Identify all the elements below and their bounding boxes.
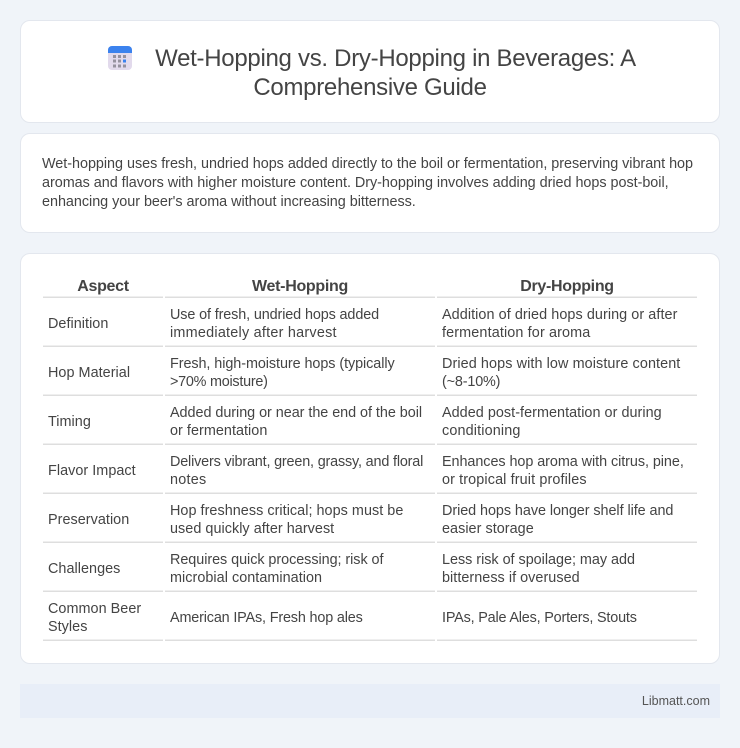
common beer styles dry: IPAs, Pale Ales, Porters, Stouts	[442, 610, 637, 626]
row: preservation: Preservation	[48, 512, 129, 528]
row: flavor impact: Flavor Impact	[48, 463, 136, 479]
hop material dry	[442, 356, 680, 390]
row: challenges: Challenges	[48, 561, 120, 577]
footer brand: Libmatt.com	[642, 694, 710, 708]
flavor impact wet	[170, 454, 423, 488]
row: definition: Definition	[48, 316, 108, 332]
intro card	[20, 133, 720, 233]
timing wet	[170, 405, 422, 439]
challenges wet: Requires quick processing; risk of	[170, 552, 383, 568]
challenges wet	[170, 552, 384, 586]
challenges dry	[442, 552, 635, 586]
definition dry: Addition of dried hops during or after	[442, 307, 677, 323]
hop material wet	[170, 356, 395, 390]
timing wet: Added during or near the end of the boil	[170, 405, 422, 421]
hop material dry: Dried hops with low moisture content	[442, 356, 680, 372]
flavor impact wet: Delivers vibrant, green, grassy, and floral	[170, 454, 423, 470]
preservation wet	[170, 503, 403, 537]
timing dry: Added post-fermentation or during	[442, 405, 662, 421]
row: common beer styles: Common Beer	[48, 601, 141, 617]
row: common beer styles	[48, 601, 141, 635]
definition dry	[442, 307, 678, 341]
intro text: enhancing your beer's aroma without increasing bitterness.	[42, 194, 416, 210]
icon: calendar	[108, 46, 132, 70]
intro text: aromas and flavors with higher moisture content. Dry-hopping involves adding dried hops post-boil,	[42, 175, 669, 191]
preservation dry	[442, 503, 673, 537]
table header: aspect: Aspect	[77, 278, 129, 295]
definition dry: fermentation for aroma	[442, 325, 590, 341]
title card	[20, 20, 720, 123]
flavor impact dry: or tropical fruit profiles	[442, 472, 587, 488]
challenges dry: bitterness if overused	[442, 570, 580, 586]
row: hop material: Hop Material	[48, 365, 130, 381]
flavor impact dry	[442, 454, 684, 488]
flavor impact dry: Enhances hop aroma with citrus, pine,	[442, 454, 684, 470]
preservation wet: used quickly after harvest	[170, 521, 334, 537]
challenges wet: microbial contamination	[170, 570, 322, 586]
preservation dry: Dried hops have longer shelf life and	[442, 503, 673, 519]
footer	[20, 684, 720, 718]
table header: dry-hopping: Dry-Hopping	[520, 278, 614, 295]
row: common beer styles: Styles	[48, 619, 87, 635]
row: timing: Timing	[48, 414, 91, 430]
heading	[155, 45, 636, 101]
timing wet: or fermentation	[170, 423, 267, 439]
flavor impact wet: notes	[170, 472, 206, 488]
definition wet: Use of fresh, undried hops added	[170, 307, 379, 323]
preservation dry: easier storage	[442, 521, 534, 537]
definition wet: immediately after harvest	[170, 325, 337, 341]
definition wet	[170, 307, 379, 341]
timing dry: conditioning	[442, 423, 520, 439]
hop material wet: Fresh, high-moisture hops (typically	[170, 356, 395, 372]
preservation wet: Hop freshness critical; hops must be	[170, 503, 403, 519]
hop material dry: (~8-10%)	[442, 374, 500, 390]
comparison table card	[20, 253, 720, 664]
common beer styles wet: American IPAs, Fresh hop ales	[170, 610, 363, 626]
timing dry	[442, 405, 662, 439]
hop material wet: >70% moisture)	[170, 374, 268, 390]
heading: Wet-Hopping vs. Dry-Hopping in Beverages: A	[155, 45, 636, 72]
table header: wet-hopping: Wet-Hopping	[252, 278, 348, 295]
challenges dry: Less risk of spoilage; may add	[442, 552, 635, 568]
intro text: Wet-hopping uses fresh, undried hops added directly to the boil or fermentation, preserving vibrant hop	[42, 156, 693, 172]
intro text	[42, 156, 693, 210]
heading: Comprehensive Guide	[253, 74, 487, 101]
